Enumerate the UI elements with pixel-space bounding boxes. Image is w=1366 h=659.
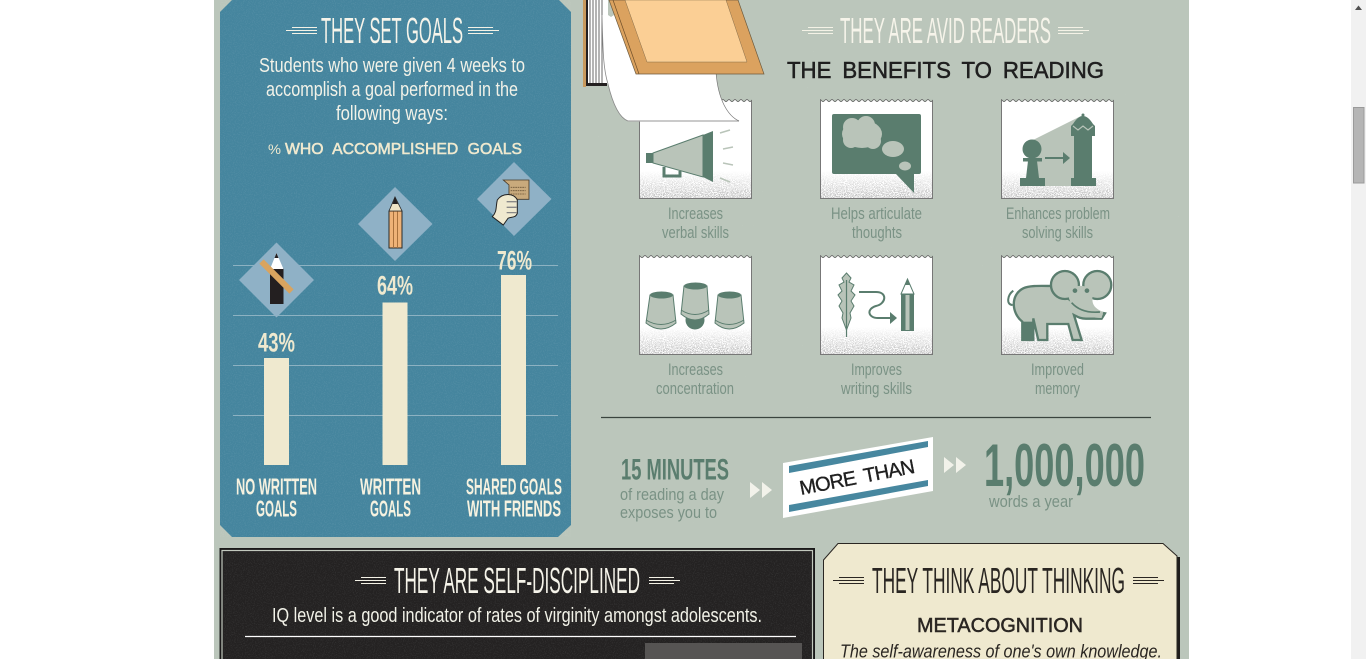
icon: hand holding note [477,162,552,236]
bar: no written goals [236,328,317,522]
text: 15 minutes of reading [620,454,729,522]
caption: Increases [668,361,723,379]
bar: shared goals with friends: 76% [497,246,532,276]
text: 1,000,000 words a year [984,432,1145,511]
card: problem solving [1001,99,1114,242]
grey chart block [645,643,802,659]
caption: solving skills [1022,224,1093,242]
subheading: metacognition: METACOGNITION [917,615,1083,637]
icon: megaphone [646,130,733,182]
body text: IQ level is a good indicator of rates of virginity amongst adolescents. [272,605,762,627]
bar: written goals [360,270,421,522]
caption: Increases [668,205,723,223]
icon: quill and pencil [838,273,914,337]
heading: they are self-disciplined [355,560,680,601]
icon: pawn and rook [1020,114,1096,186]
card: articulate thoughts [820,99,933,242]
text: 1,000,000 words a year: 1,000,000 [984,432,1145,499]
caption: verbal skills [662,224,729,242]
caption: writing skills [840,380,912,398]
bar: no written goals: NO WRITTEN [236,474,317,500]
chart subtitle: WHO ACCOMPLISHED GOALS [285,141,522,158]
bar chart [233,246,562,522]
bar: shared goals with friends [466,246,562,522]
text: 15 minutes of reading: of reading a day [620,485,724,504]
caption: concentration [656,380,734,398]
arrow: double chevron [750,482,772,498]
heading: they set goals [286,10,499,51]
intro text: Students who were given 4 weeks to [259,55,525,77]
heading: they are avid readers [802,10,1089,51]
panel: they set goals [220,0,571,537]
bar: shared goals with friends: WITH FRIENDS [467,496,561,522]
bar: written goals: GOALS [370,496,411,522]
icon: orange pencil [358,187,432,261]
banner: more than: MORE THAN [798,456,917,500]
icon: speech bubble [832,114,921,193]
caption [1031,361,1084,398]
caption [1006,205,1110,242]
caption [662,205,729,242]
intro text: accomplish a goal performed in the [266,79,518,101]
icon: crossed out black pencil [239,242,314,318]
bar: written goals: 64% [377,270,413,300]
caption: Helps articulate [831,205,922,223]
bar: no written goals: 43% [258,328,295,358]
text: 15 minutes of reading: 15 MINUTES [621,454,729,486]
chart subtitle: % [268,141,281,157]
text: 1,000,000 words a year: words a year [988,492,1073,511]
intro text: following ways: [336,103,448,125]
caption [656,361,734,398]
heading: they are avid readers: THEY ARE AVID READERS [840,10,1051,51]
heading: they set goals: THEY SET GOALS [321,10,463,51]
panel: they are self-disciplined [220,548,815,659]
icon: elephant [1008,271,1111,340]
browser scrollbar [1351,0,1366,659]
bar: written goals: WRITTEN [360,474,421,500]
caption: Improved [1031,361,1084,379]
banner: more than [783,437,933,518]
heading: they are self-disciplined: THEY ARE SELF-DISCIPLINED [394,560,640,601]
caption [831,205,922,242]
panel: they are avid readers [601,10,1151,522]
intro text [259,55,525,125]
bar: shared goals with friends: SHARED GOALS [466,474,562,500]
card: writing skills [820,255,933,398]
card: memory [1001,255,1114,398]
subheading: the benefits to reading: THE BENEFITS TO READING [787,57,1104,83]
text: 15 minutes of reading: exposes you to [620,503,717,522]
panel: they think about thinking [824,544,1180,659]
caption: Improves [851,361,902,379]
bar: no written goals: GOALS [256,496,297,522]
arrow: double chevron [944,457,966,473]
card: concentration [639,255,752,398]
caption: thoughts [852,224,902,242]
page background panel [214,0,1189,659]
icon: open book with curling page [583,0,764,121]
heading: they think about thinking [833,560,1164,601]
card: verbal skills [639,99,752,242]
caption [840,361,912,398]
icon: three cups and ball [646,282,744,330]
caption: Enhances problem [1006,205,1110,223]
caption: memory [1035,380,1081,398]
